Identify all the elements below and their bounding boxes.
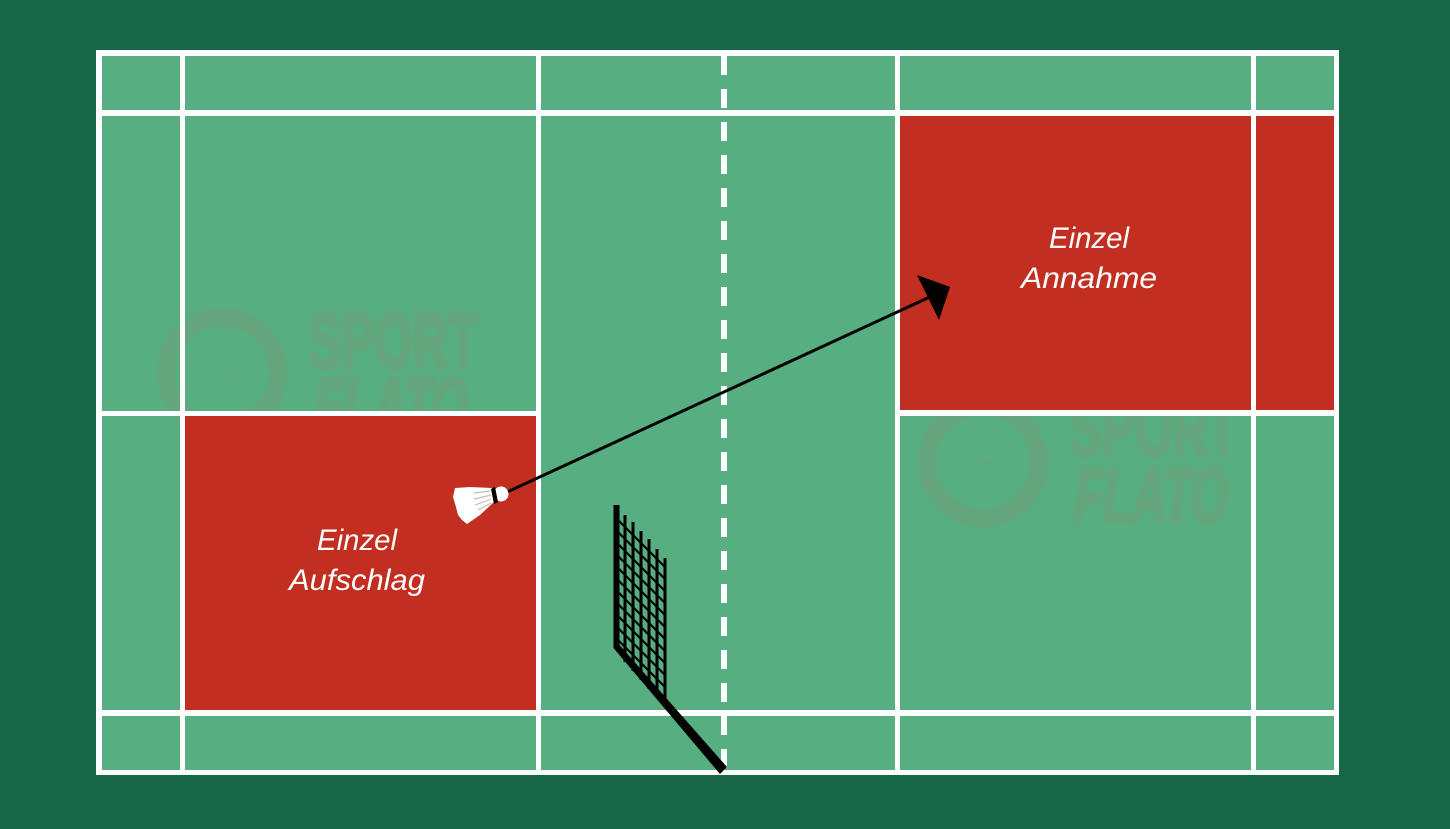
dashed centre line	[721, 56, 727, 770]
label: Einzel Aufschlag: Einzel	[317, 524, 398, 557]
watermark: right logo: SPORT	[1070, 385, 1238, 473]
red service zone: left	[185, 416, 536, 710]
label: Einzel Annahme: Einzel	[1049, 222, 1130, 255]
court lines	[96, 50, 1339, 775]
watermark: left logo: SPORT	[309, 297, 478, 385]
watermark: left logo: FLATO	[314, 361, 468, 449]
badminton court diagram	[96, 50, 1339, 775]
icon: shuttlecock	[453, 486, 508, 524]
net	[614, 505, 727, 774]
label: Einzel Annahme	[1019, 222, 1157, 295]
label: Einzel Aufschlag: Aufschlag	[287, 564, 425, 597]
label: Einzel Annahme: Annahme	[1019, 262, 1157, 295]
watermark: right logo	[927, 385, 1238, 539]
red receive zone: right	[900, 116, 1334, 410]
watermark: left logo	[166, 297, 478, 449]
court surface	[96, 50, 1339, 775]
label: Einzel Aufschlag	[287, 524, 425, 597]
watermark: right logo: FLATO	[1074, 451, 1228, 539]
arrow: serve trajectory	[505, 275, 950, 493]
